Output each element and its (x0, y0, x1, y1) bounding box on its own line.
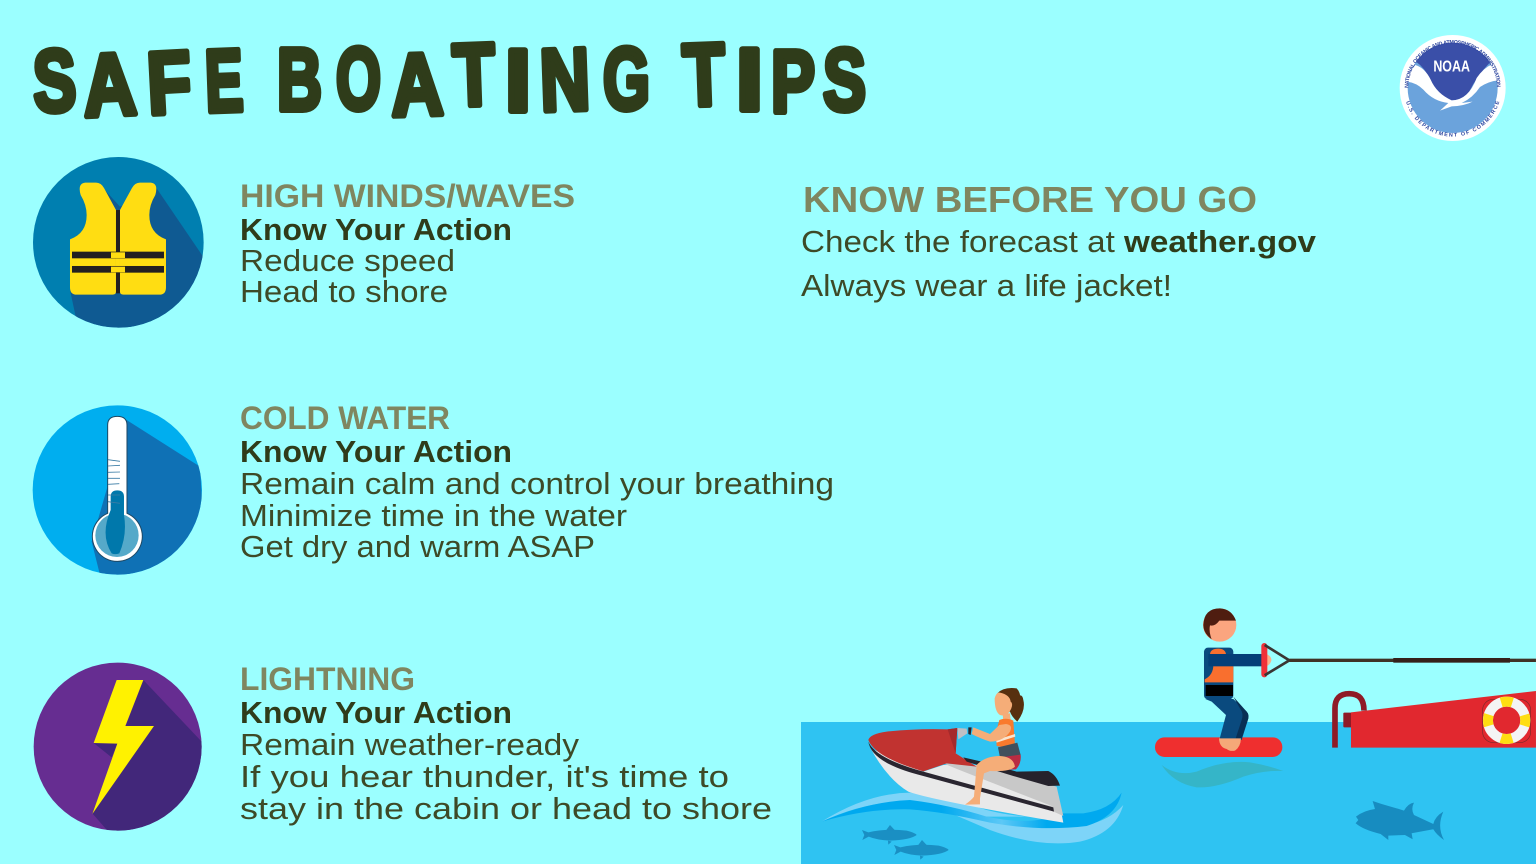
NOAA logo: NATIONAL OCEANIC AND ATMOSPHERIC ADMINISTRATION (1404, 40, 1501, 88)
text block: lightning: stay in the cabin or head to shore (240, 791, 772, 826)
text block: cold water: Get dry and warm ASAP (240, 529, 595, 564)
NOAA logo: U.S. DEPARTMENT OF COMMERCE (1406, 100, 1500, 137)
text block: lightning: If you hear thunder, it's time to (240, 759, 729, 794)
title: N (538, 29, 592, 130)
text block: high winds (240, 178, 575, 309)
jet ski hull (868, 728, 1063, 823)
tow handle and rope (1261, 643, 1536, 677)
title: G (603, 29, 650, 128)
illustration: water skier and boat (1155, 608, 1536, 840)
text block: cold water: Minimize time in the water (240, 498, 627, 533)
life ring (1483, 699, 1531, 743)
title: F (145, 32, 194, 133)
text block: know before you go: Check the forecast at weather.gov (801, 224, 1317, 259)
text block: cold water: Know Your Action (240, 434, 512, 469)
illustration: jet ski rider (822, 688, 1123, 860)
text block: high winds: Reduce speed (240, 243, 455, 278)
text block: lightning: Know Your Action (240, 695, 512, 730)
rider (965, 688, 1024, 805)
wave under jet ski (822, 793, 1123, 843)
text block: high winds: Head to shore (240, 274, 448, 309)
title: I (505, 31, 531, 130)
title (31, 24, 866, 135)
wakeboard (1155, 737, 1282, 757)
fish (862, 825, 949, 860)
wake (1162, 762, 1283, 787)
title: O (336, 29, 381, 128)
skier (1203, 608, 1271, 751)
text block: lightning: LIGHTNING (240, 661, 415, 697)
title: P (771, 32, 815, 131)
text block: lightning (240, 661, 772, 826)
boat (1335, 691, 1536, 748)
NOAA logo: NOAA (1433, 59, 1470, 76)
title: A (80, 34, 139, 135)
title: T (451, 24, 497, 125)
text block: cold water: COLD WATER (240, 400, 450, 436)
text block: cold water (240, 400, 834, 564)
icon: life jacket (33, 157, 207, 337)
text block: lightning: Remain weather-ready (240, 727, 580, 762)
text block: know before you go: KNOW BEFORE YOU GO (803, 179, 1257, 220)
title: A (389, 34, 445, 135)
text block: know before you go: Always wear a life jacket! (801, 268, 1172, 303)
icon: lightning (34, 663, 207, 837)
tuna (1356, 801, 1444, 840)
text block: know before you go (801, 179, 1317, 303)
title: S (31, 30, 78, 131)
title: E (203, 30, 245, 131)
title: I (736, 30, 763, 129)
text block: high winds: Know Your Action (240, 212, 512, 247)
icon: thermometer (33, 405, 207, 582)
text block: cold water: Remain calm and control your breathing (240, 466, 834, 501)
title: S (823, 30, 866, 129)
text block: high winds: HIGH WINDS/WAVES (240, 178, 575, 214)
title: T (681, 24, 727, 125)
title: B (277, 30, 322, 129)
water (801, 722, 1536, 864)
NOAA logo (1400, 35, 1506, 141)
